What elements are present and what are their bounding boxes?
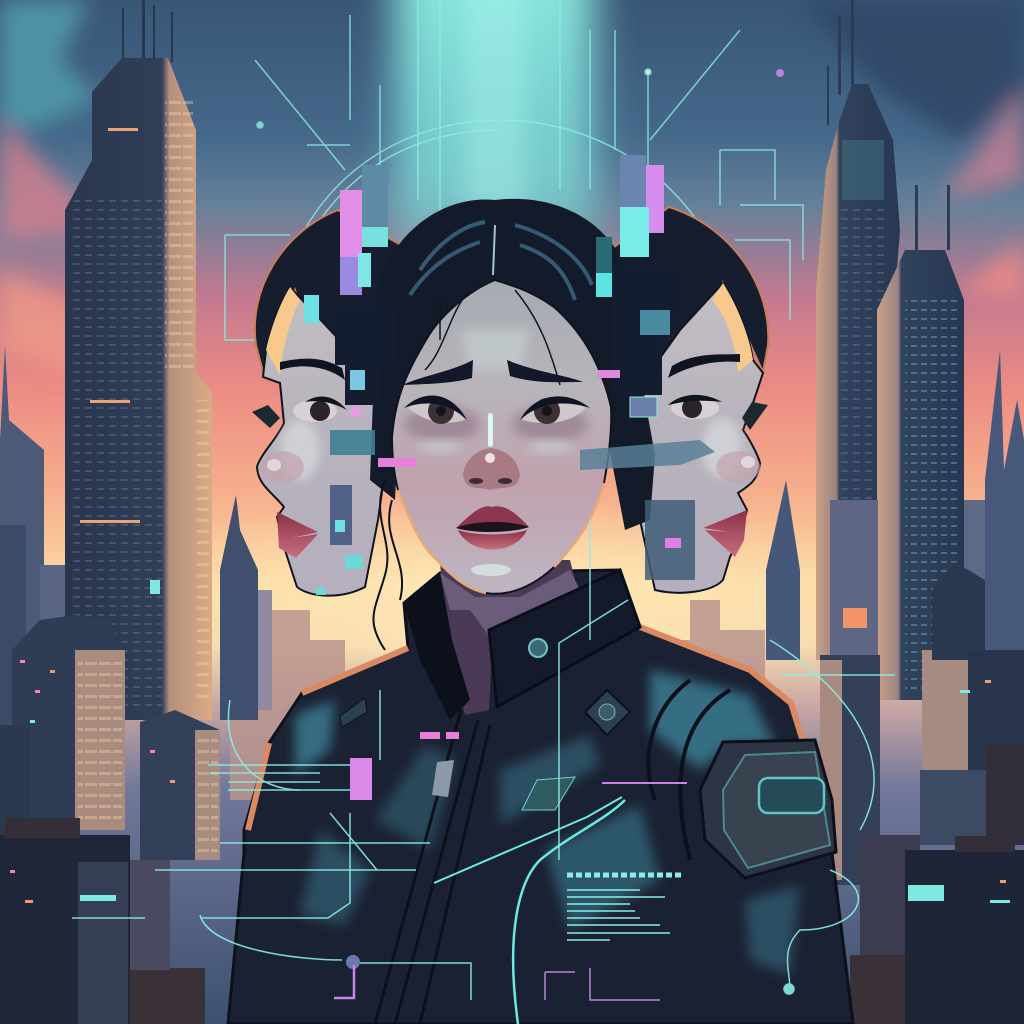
under-eye highlights [418,440,462,452]
left main tower [65,0,212,720]
hair left [255,210,410,400]
distant skyline [230,600,765,800]
nose [463,448,520,490]
eyes [404,406,480,442]
sleeve seams [648,680,730,860]
eyebrows [402,360,473,385]
light beam from top [395,0,595,300]
digital fragments right [580,155,715,580]
orange rim light on shoulders [248,627,815,830]
main head [370,199,655,650]
face [392,280,611,594]
face left profile [257,287,395,596]
hair streaks [410,222,592,300]
hair back [370,199,655,530]
chin highlight [471,564,511,576]
sci-fi circuit lines [225,0,803,340]
foreground buildings left [0,580,220,1024]
lower-face peach rim [398,483,604,593]
circuit lines over body [72,520,895,1000]
right towers [766,0,1024,720]
neck [440,560,580,715]
side face right [610,207,768,593]
foreground buildings right [820,562,1024,1024]
left skyline small towers [0,345,272,765]
side face left [252,210,410,596]
pink accents and data block [334,732,687,1000]
jacket [228,560,853,1024]
digital fragments left [304,165,416,595]
lips [456,506,529,528]
teal highlights [295,670,800,975]
